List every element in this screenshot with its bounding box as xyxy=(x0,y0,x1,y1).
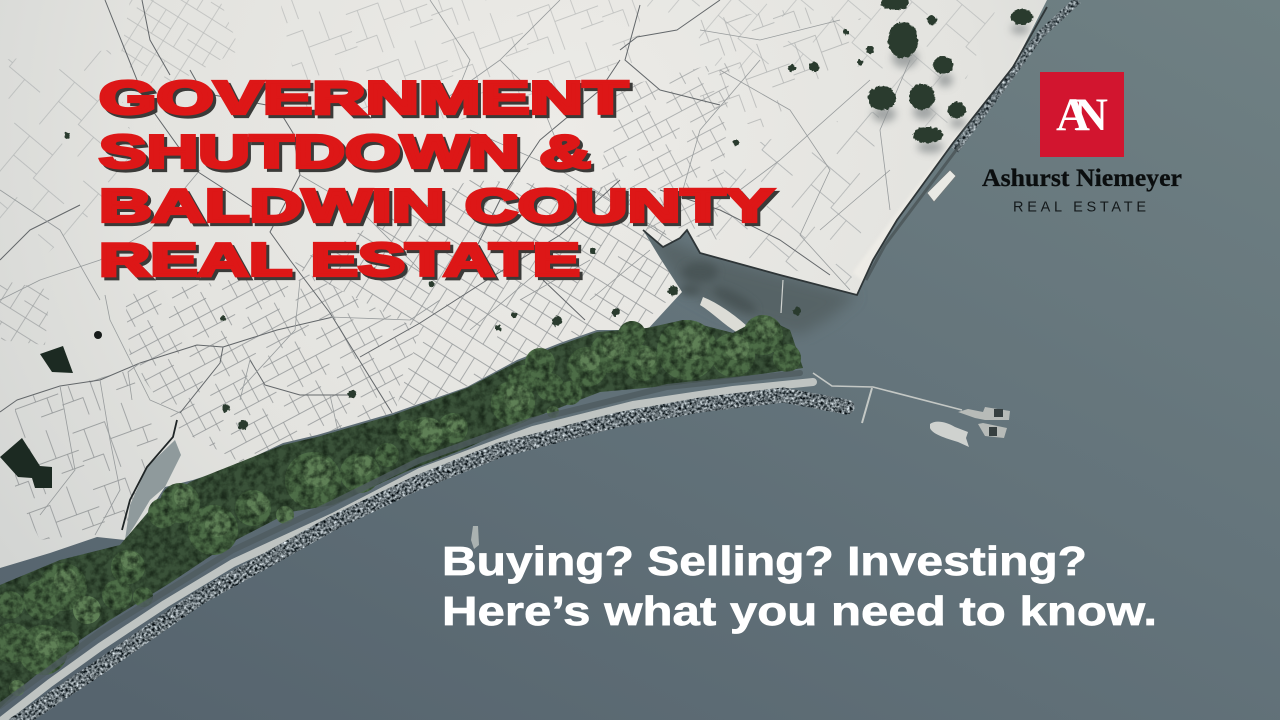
estuary: dark mottled channel xyxy=(643,230,857,335)
tagline: Buying? Selling? Investing? xyxy=(442,538,1087,584)
seawall: road, light strip and rock breakwater xyxy=(0,373,847,720)
title: government shutdown and Baldwin County real estate: BALDWIN COUNTY xyxy=(99,179,774,231)
dark wooded parcels xyxy=(0,346,73,488)
title: government shutdown and Baldwin County real estate xyxy=(99,71,774,285)
map: land mass with street network xyxy=(0,0,1050,568)
title: government shutdown and Baldwin County real estate: REAL ESTATE xyxy=(99,233,580,285)
river mouth xyxy=(122,420,181,540)
east coast: rock edge and pier xyxy=(643,0,1078,295)
logo: Ashurst Niemeyer Real Estate xyxy=(982,72,1182,216)
major roads xyxy=(0,0,830,413)
title: government shutdown and Baldwin County real estate: GOVERNMENT xyxy=(99,71,628,123)
dock and boats xyxy=(471,373,1010,549)
secondary roads xyxy=(0,0,910,535)
logo: Ashurst Niemeyer Real Estate: REAL ESTATE xyxy=(1013,200,1146,216)
logo: Ashurst Niemeyer Real Estate: AN xyxy=(1056,89,1108,141)
tree belt along the shoreline xyxy=(0,315,803,708)
scattered trees and shadows on land xyxy=(0,0,1033,488)
title: government shutdown and Baldwin County real estate: SHUTDOWN & xyxy=(99,125,591,177)
sand along the east coast xyxy=(862,20,1050,280)
logo: Ashurst Niemeyer Real Estate: Ashurst Niemeyer xyxy=(982,165,1182,192)
tagline xyxy=(442,538,1157,634)
tagline: Here’s what you need to know. xyxy=(442,588,1157,634)
